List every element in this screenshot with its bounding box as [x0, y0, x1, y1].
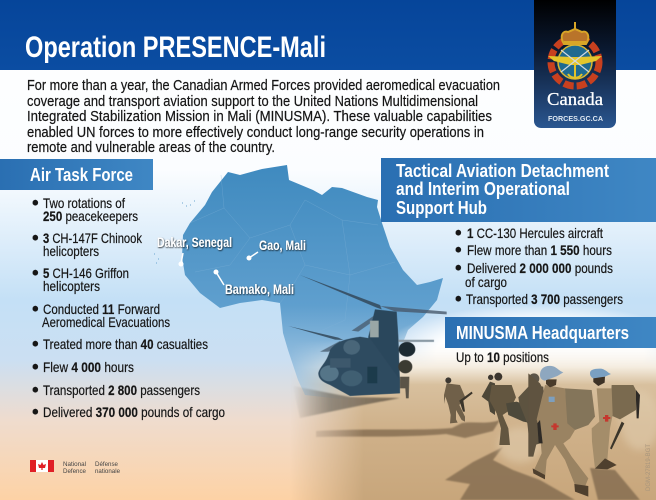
list: Tactical Aviation facts: 1 CC-130 Hercules aircraft [467, 225, 603, 241]
shadows on the sand [316, 420, 640, 500]
soldier walking alone [444, 377, 473, 423]
icon: Canadian Armed Forces crest [548, 22, 602, 86]
photo: helicopter and soldiers in the desert [288, 275, 656, 500]
list: Tactical Aviation facts: Flew more than 1 550 hours [467, 242, 612, 258]
list: Air Task Force facts: 5 CH-146 Griffon [43, 265, 129, 281]
dust patches [498, 390, 656, 463]
list: Air Task Force facts: • [32, 193, 39, 214]
list: Air Task Force facts: Delivered 370 000 pounds of cargo [43, 404, 225, 420]
intro paragraph [27, 78, 500, 156]
National Defence signature: nationale [95, 469, 121, 475]
list: Air Task Force facts: • [32, 402, 39, 423]
National Defence signature [30, 460, 121, 475]
list: Tactical Aviation facts: Delivered 2 000 000 pounds [467, 260, 613, 276]
text: MINUSMA positions: Up to 10 positions [456, 349, 549, 365]
label: Bamako, Mali: Bamako, Mali [225, 282, 294, 297]
list: Air Task Force facts: • [32, 380, 39, 401]
label: Gao, Mali: Gao, Mali [259, 238, 306, 253]
intro paragraph: For more than a year, the Canadian Armed Forces provided aeromedical evacuation [27, 78, 500, 94]
list: Air Task Force facts [32, 193, 225, 423]
soldiers carrying a stretcher [482, 373, 545, 447]
forces.gc.ca label: FORCES.GC.CA [548, 116, 603, 123]
header band [0, 0, 656, 70]
icon: Canadian flag [30, 460, 54, 472]
helicopter [288, 275, 447, 398]
list: Air Task Force facts: • [32, 299, 39, 320]
white haze behind the horizon [380, 304, 656, 400]
National Defence signature: Défense [95, 462, 119, 468]
list: Tactical Aviation facts: of cargo [465, 274, 507, 290]
intro paragraph: remote and vulnerable areas of the country. [27, 140, 275, 156]
panel: Tactical Aviation Detachment: Tactical Aviation Detachment [396, 161, 609, 181]
list: Tactical Aviation facts: Transported 3 700 passengers [466, 291, 623, 307]
soldier with blue helmet, rear [590, 369, 640, 469]
islands [154, 201, 195, 263]
Canada wordmark: Canada [547, 89, 603, 109]
list: Air Task Force facts: Aeromedical Evacuations [42, 314, 170, 330]
National Defence signature: Defence [63, 469, 87, 475]
panel: Tactical Aviation Detachment: Support Hub [396, 198, 487, 218]
National Defence signature: National [63, 462, 86, 468]
soldier with blue helmet, front [528, 366, 595, 497]
location labels on map [157, 235, 306, 297]
intro paragraph: coverage and transport aviation support to the United Nations Multidimensional [27, 94, 478, 110]
intro paragraph: enabled UN forces to more effectively conduct long-range security operations in [27, 125, 484, 141]
reference code: DGM-27819-BGT [646, 444, 652, 491]
label: Bamako, Mali [214, 270, 294, 297]
list: Tactical Aviation facts: • [455, 223, 462, 244]
panel: Tactical Aviation Detachment [381, 158, 656, 222]
label: Dakar, Senegal: Dakar, Senegal [157, 235, 232, 250]
list: Air Task Force facts: Treated more than 40 casualties [43, 336, 208, 352]
label: Dakar, Senegal [157, 235, 232, 266]
list: Air Task Force facts: helicopters [43, 243, 99, 259]
list: Air Task Force facts: • [32, 334, 39, 355]
list: Air Task Force facts: Flew 4 000 hours [43, 359, 134, 375]
list: Tactical Aviation facts: • [455, 258, 462, 279]
list: Air Task Force facts: • [32, 357, 39, 378]
list: Air Task Force facts: helicopters [43, 278, 100, 294]
panel: Tactical Aviation Detachment: and Interim Operational [396, 179, 570, 199]
list: Air Task Force facts: Transported 2 800 passengers [43, 382, 200, 398]
list: Air Task Force facts: • [32, 263, 39, 284]
list: Air Task Force facts: 3 CH-147F Chinook [43, 230, 143, 246]
helicopter shadow [293, 386, 400, 418]
map of Africa [154, 165, 443, 400]
intro paragraph: Integrated Stabilization Mission in Mali (MINUSMA). These valuable capabilities [27, 109, 492, 125]
title: Operation PRESENCE-Mali [25, 31, 326, 64]
list: Tactical Aviation facts: • [455, 289, 462, 310]
list: Tactical Aviation facts [455, 223, 623, 310]
list: Air Task Force facts: 250 peacekeepers [43, 208, 138, 224]
panel: Air Task Force: Air Task Force [30, 165, 133, 185]
label: Gao, Mali [246, 238, 306, 260]
list: Air Task Force facts: • [32, 228, 39, 249]
logo badge [534, 0, 616, 128]
list: Tactical Aviation facts: • [455, 240, 462, 261]
list: Air Task Force facts: Conducted 11 Forward [43, 301, 160, 317]
panel: Air Task Force [0, 159, 153, 190]
panel: MINUSMA Headquarters [445, 317, 656, 348]
list: Air Task Force facts: Two rotations of [43, 195, 125, 211]
